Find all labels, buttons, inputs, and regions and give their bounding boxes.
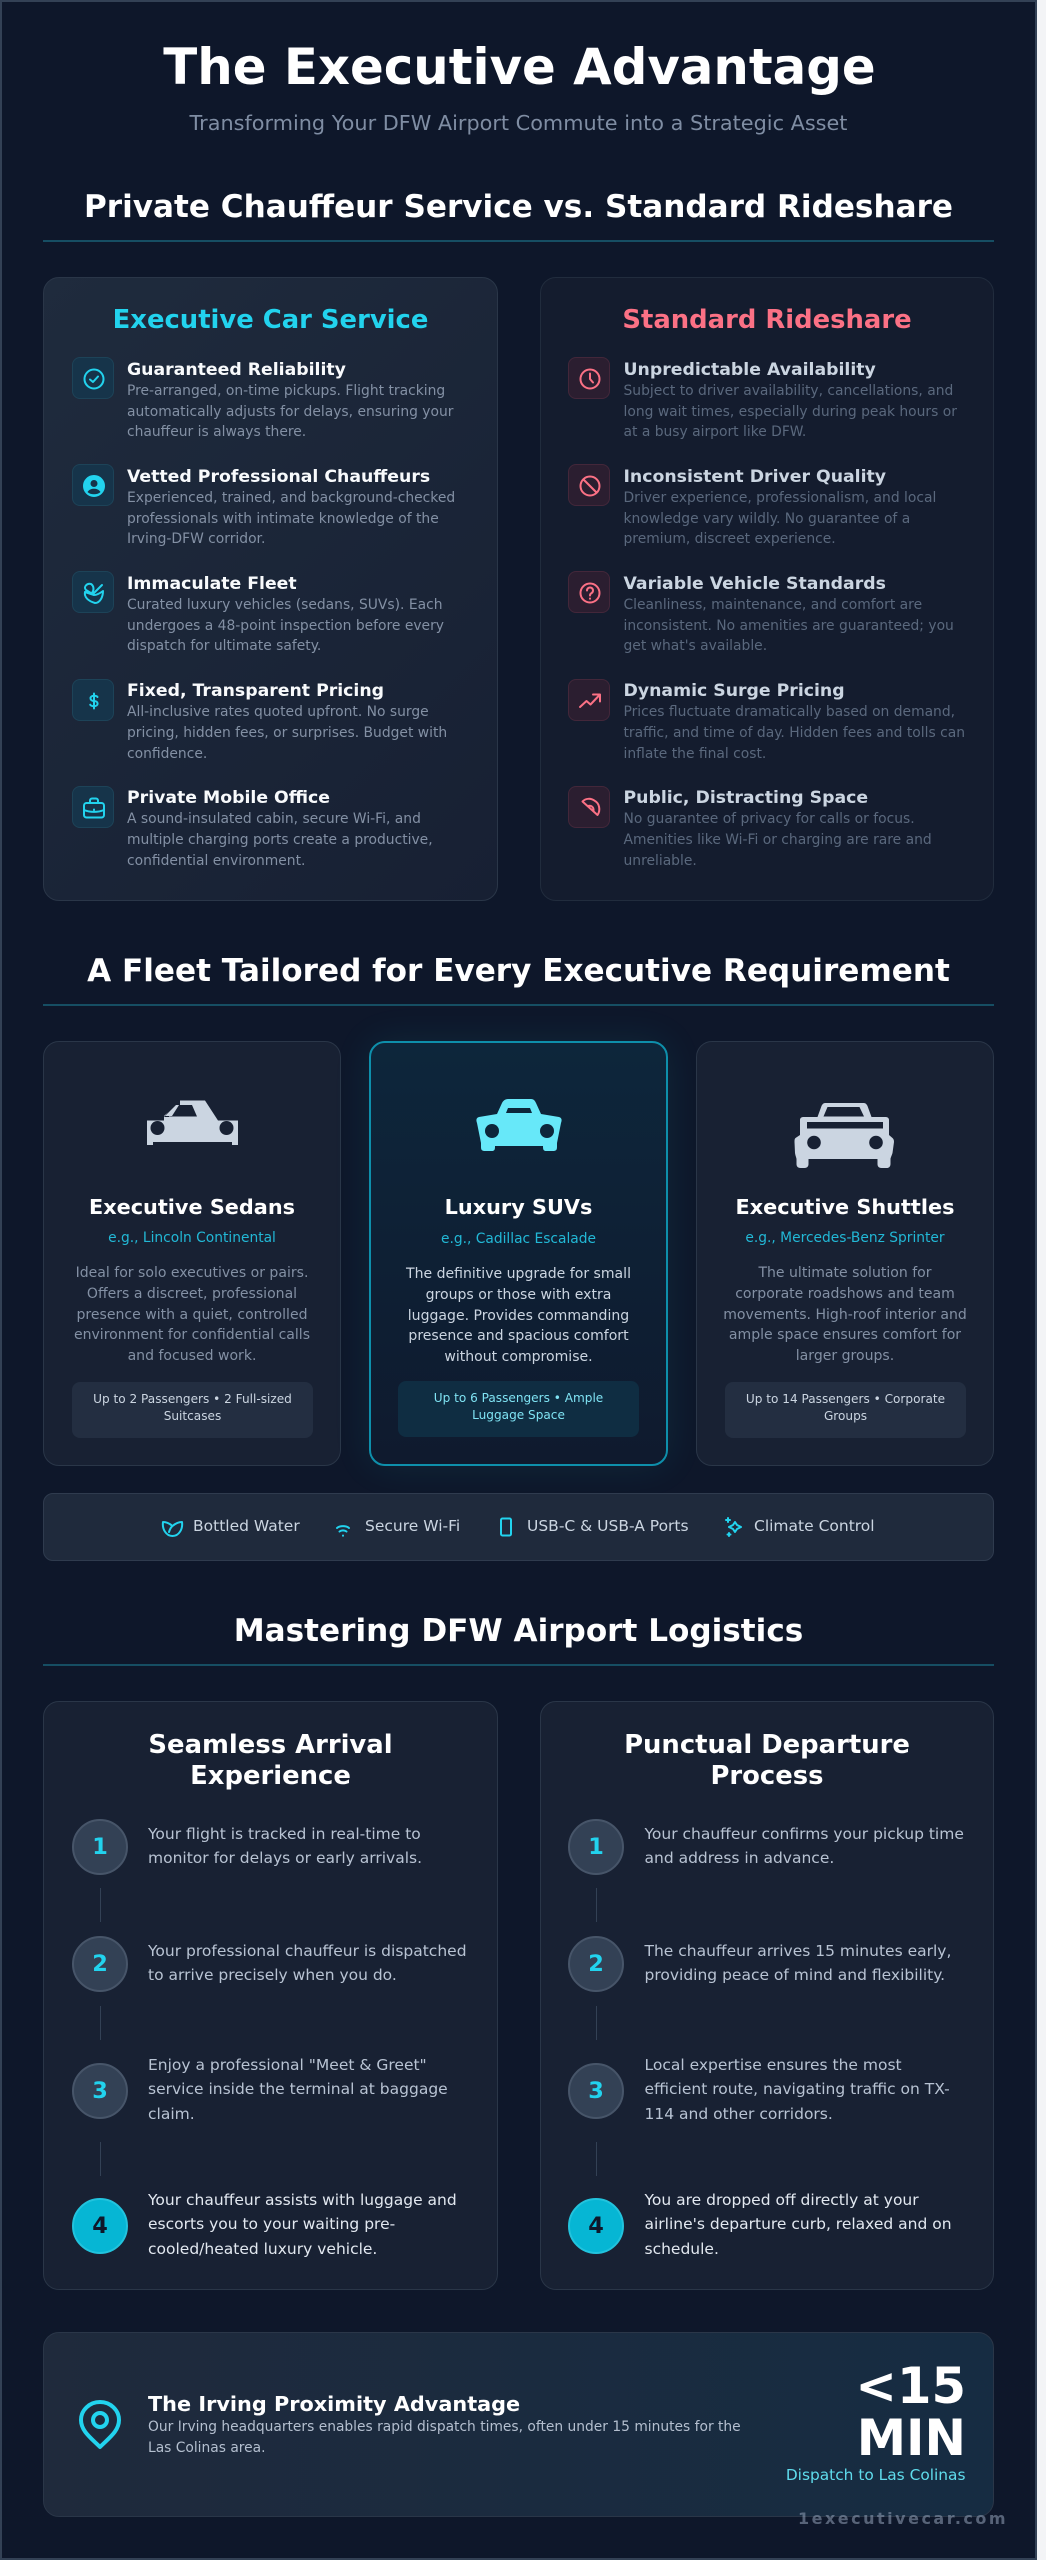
icon: map pin <box>79 2400 121 2450</box>
icon: clock <box>568 357 610 399</box>
item: variable vehicle standards: inconsistent. No amenities are guaranteed; you <box>624 618 954 634</box>
icon: sparkle <box>725 1517 742 1537</box>
panel: executive shuttles: e.g., Mercedes-Benz Sprinter <box>745 1230 945 1246</box>
item: variable vehicle standards: get what's available. <box>624 638 767 654</box>
callout text: Las Colinas area. <box>148 2440 266 2456</box>
step 3 text: service inside the terminal at baggage <box>148 2080 448 2098</box>
item: surge pricing: traffic, and time of day. Hidden fees and tolls can <box>624 725 965 741</box>
panel: executive sedans: Ideal for solo executives or pairs. <box>76 1265 308 1281</box>
item: immaculate fleet: Immaculate Fleet <box>127 574 297 594</box>
step 2 text <box>644 1942 951 1984</box>
panel: executive shuttles: The ultimate solution for <box>758 1265 932 1281</box>
heading: arrival: Experience <box>190 1760 351 1790</box>
icon: question <box>568 571 610 613</box>
item: immaculate fleet: undergoes a 48-point inspection before every <box>127 618 444 634</box>
step 1: 1 <box>588 1834 604 1860</box>
item: guaranteed reliability: automatically adjusts for delays, ensuring your <box>127 404 453 420</box>
spec: sedans <box>72 1382 313 1438</box>
icon: half disc <box>568 786 610 828</box>
item: immaculate fleet: Curated luxury vehicles (sedans, SUVs). Each <box>127 597 443 613</box>
subtitle: Transforming Your DFW Airport Commute into a Strategic Asset <box>190 111 847 135</box>
item: inconsistent quality <box>568 464 936 547</box>
watermark: 1executivecar.com <box>798 2509 1008 2528</box>
stat: under 15 min: <15 <box>855 2357 966 2415</box>
icon: check circle <box>72 357 114 399</box>
spec: sedans: Suitcases <box>164 1409 221 1423</box>
item: inconsistent quality: Driver experience, professionalism, and local <box>624 490 936 506</box>
step 2: 2 <box>92 1951 108 1977</box>
heading: departure <box>624 1730 910 1790</box>
step 4 text: airline's departure curb, relaxed and on <box>644 2215 952 2233</box>
item: public space: Public, Distracting Space <box>624 788 868 808</box>
item: unpredictable availability: Subject to driver availability, cancellations, and <box>624 383 953 399</box>
item: mobile office: confidential environment. <box>127 853 305 869</box>
panel: departure <box>540 1701 994 2290</box>
item: vetted chauffeurs: Irving-DFW corridor. <box>127 531 265 547</box>
item: vetted chauffeurs: professionals with intimate knowledge of the <box>127 511 439 527</box>
step 3: 3 <box>92 2078 108 2104</box>
step 1 text <box>148 1825 422 1867</box>
panel: executive shuttles <box>696 1041 994 1466</box>
item: guaranteed reliability <box>72 357 454 440</box>
icon: phone <box>500 1518 512 1536</box>
item: mobile office: A sound-insulated cabin, secure Wi-Fi, and <box>127 811 421 827</box>
item: unpredictable availability: Unpredictable Availability <box>624 360 876 380</box>
step 1: 1 <box>92 1834 108 1860</box>
amenity: bottled water: Bottled Water <box>193 1517 300 1535</box>
heading: logistics section: Mastering DFW Airport Logistics <box>234 1613 803 1649</box>
item: surge pricing: Dynamic Surge Pricing <box>624 681 845 701</box>
item: mobile office: Private Mobile Office <box>127 788 330 808</box>
spec: SUVs: Up to 6 Passengers • Ample <box>434 1391 603 1405</box>
step 4 text: schedule. <box>644 2240 719 2258</box>
icon: prohibited <box>568 464 610 506</box>
item: transparent pricing: pricing, hidden fees, or surprises. Budget with <box>127 725 447 741</box>
item: inconsistent quality: Inconsistent Driver Quality <box>624 466 886 486</box>
step 1 text: Your flight is tracked in real-time to <box>148 1825 421 1843</box>
item: surge pricing: Prices fluctuate dramatically based on demand, <box>624 704 955 720</box>
panel: executive shuttles: ample space ensures comfort for <box>729 1327 961 1343</box>
step 4 text: escorts you to your waiting pre- <box>148 2215 395 2233</box>
item: transparent pricing <box>72 679 447 762</box>
item: public space: Amenities like Wi-Fi or charging are rare and <box>624 832 932 848</box>
spec: shuttles: Groups <box>824 1409 867 1423</box>
item: immaculate fleet <box>72 571 444 654</box>
step 4: 4 <box>588 2213 604 2239</box>
step 3 text <box>148 2056 448 2123</box>
panel: standard rideshare <box>540 277 994 901</box>
step 1 <box>72 1819 128 1875</box>
callout text <box>148 2419 741 2456</box>
spec: shuttles: Up to 14 Passengers • Corporate <box>746 1392 945 1406</box>
item: guaranteed reliability: Guaranteed Reliability <box>127 360 346 380</box>
panel: executive sedans: environment for confidential calls <box>74 1327 310 1343</box>
panel: executive car service <box>43 277 498 901</box>
step 4 text: Your chauffeur assists with luggage and <box>148 2191 457 2209</box>
step 3 text: Enjoy a professional "Meet & Greet" <box>148 2056 427 2074</box>
callout text: Our Irving headquarters enables rapid dispatch times, often under 15 minutes for the <box>148 2419 741 2435</box>
step 1 <box>568 1819 624 1875</box>
step 3 <box>72 2063 128 2119</box>
amenity: wifi: Secure Wi-Fi <box>365 1517 460 1535</box>
item: transparent pricing: confidence. <box>127 746 207 762</box>
step 3 text: 114 and other corridors. <box>644 2105 833 2123</box>
item: inconsistent quality: knowledge vary wildly. No guarantee of a <box>624 511 910 527</box>
panel: executive sedans: and focused work. <box>128 1348 256 1364</box>
item: public space: No guarantee of privacy for calls or focus. <box>624 811 915 827</box>
step 3 text: efficient route, navigating traffic on TX- <box>644 2080 950 2098</box>
icon: trending up <box>568 678 610 720</box>
panel: executive sedans: presence with a quiet, controlled <box>76 1307 308 1323</box>
item: mobile office: multiple charging ports create a productive, <box>127 832 433 848</box>
stat label: Dispatch to Las Colinas <box>786 2466 966 2484</box>
panel: luxury SUVs: presence and spacious comfort <box>408 1328 629 1344</box>
panel: luxury SUVs: Luxury SUVs <box>445 1195 592 1219</box>
amenity: climate: Climate Control <box>754 1517 875 1535</box>
spec: SUVs <box>398 1381 639 1437</box>
item: unpredictable availability: long wait times, especially during peak hours or <box>624 404 957 420</box>
icon: fleet shape <box>72 571 114 613</box>
amenity: ports: USB-C & USB-A Ports <box>527 1517 689 1535</box>
step 3: 3 <box>588 2078 604 2104</box>
step 4: 4 <box>92 2213 108 2239</box>
title: The Executive Advantage <box>163 38 876 96</box>
item: transparent pricing: Fixed, Transparent Pricing <box>127 681 384 701</box>
step 3 text: Local expertise ensures the most <box>644 2056 902 2074</box>
step 2 text <box>148 1942 467 1984</box>
icon: briefcase <box>72 786 114 828</box>
step 2 <box>568 1936 624 1992</box>
panel: executive sedans: Offers a discreet, professional <box>87 1286 297 1302</box>
step 3 text: claim. <box>148 2105 195 2123</box>
item: guaranteed reliability: chauffeur is always there. <box>127 424 306 440</box>
item: guaranteed reliability: Pre-arranged, on-time pickups. Flight tracking <box>127 383 445 399</box>
item: vetted chauffeurs <box>72 464 455 547</box>
spec: shuttles <box>725 1382 966 1438</box>
step 3 text <box>644 2056 950 2123</box>
spec: sedans: Up to 2 Passengers • 2 Full-sized <box>93 1392 292 1406</box>
step 4 text: You are dropped off directly at your <box>644 2191 919 2209</box>
icon: sedan <box>147 1100 238 1145</box>
item: surge pricing: inflate the final cost. <box>624 746 766 762</box>
heading: comparison section: Private Chauffeur Service vs. Standard Rideshare <box>84 189 953 225</box>
step 2 text: to arrive precisely when you do. <box>148 1966 397 1984</box>
step 2 text: The chauffeur arrives 15 minutes early, <box>644 1942 951 1960</box>
step 2 text: Your professional chauffeur is dispatched <box>148 1942 467 1960</box>
item: public space: unreliable. <box>624 853 697 869</box>
item: mobile office <box>72 786 433 869</box>
icon: SUV <box>476 1099 562 1151</box>
step 3 <box>568 2063 624 2119</box>
panel: luxury SUVs: without compromise. <box>444 1349 593 1365</box>
panel: luxury SUVs: The definitive upgrade for small <box>406 1266 631 1282</box>
icon: wifi <box>336 1525 350 1537</box>
item: vetted chauffeurs: Vetted Professional Chauffeurs <box>127 466 430 486</box>
icon: water <box>162 1521 184 1537</box>
step 1 text: and address in advance. <box>644 1849 834 1867</box>
step 1 text: monitor for delays or early arrivals. <box>148 1849 422 1867</box>
step 1 text: Your chauffeur confirms your pickup time <box>644 1825 964 1843</box>
heading: arrival <box>148 1730 393 1790</box>
item: transparent pricing: All-inclusive rates quoted upfront. No surge <box>127 704 429 720</box>
panel: luxury SUVs: luggage. Provides commanding <box>408 1308 629 1324</box>
item: variable vehicle standards: Cleanliness, maintenance, and comfort are <box>624 597 922 613</box>
step 2: 2 <box>588 1951 604 1977</box>
item: inconsistent quality: premium, discreet experience. <box>624 531 836 547</box>
stat: under 15 min: MIN <box>857 2409 966 2467</box>
step 4 text: cooled/heated luxury vehicle. <box>148 2240 377 2258</box>
panel: executive shuttles: movements. High-roof interior and <box>723 1307 967 1323</box>
heading: departure: Process <box>710 1760 824 1790</box>
panel: luxury SUVs <box>369 1041 668 1466</box>
item: immaculate fleet: dispatch for ultimate safety. <box>127 638 321 654</box>
panel: amenities bar <box>43 1493 994 1561</box>
item: vetted chauffeurs: Experienced, trained, and background-checked <box>127 490 455 506</box>
panel: executive shuttles: larger groups. <box>796 1348 894 1364</box>
heading: executive car service: Executive Car Service <box>113 304 428 334</box>
icon: user circle <box>72 464 114 506</box>
panel: irving proximity callout <box>43 2332 994 2517</box>
item: surge pricing <box>568 679 965 762</box>
heading: standard rideshare: Standard Rideshare <box>622 304 912 334</box>
item: variable vehicle standards <box>568 571 954 654</box>
panel: executive sedans: e.g., Lincoln Continental <box>108 1230 276 1246</box>
panel: executive sedans <box>43 1041 341 1466</box>
item: unpredictable availability <box>568 357 957 440</box>
panel: luxury SUVs: e.g., Cadillac Escalade <box>441 1231 596 1247</box>
panel: executive sedans: Executive Sedans <box>89 1195 295 1219</box>
heading: arrival: Seamless Arrival <box>148 1730 393 1760</box>
icon: shuttle <box>794 1103 894 1168</box>
step 4 <box>568 2198 624 2254</box>
icon: dollar <box>72 678 114 720</box>
panel: executive shuttles: Executive Shuttles <box>736 1195 954 1219</box>
item: variable vehicle standards: Variable Vehicle Standards <box>624 574 886 594</box>
step 4 <box>72 2198 128 2254</box>
heading: departure: Punctual Departure <box>624 1730 910 1760</box>
step 1 text <box>644 1825 964 1867</box>
heading: fleet section: A Fleet Tailored for Every Executive Requirement <box>87 953 950 989</box>
panel: arrival <box>43 1701 498 2290</box>
step 2 text: providing peace of mind and flexibility. <box>644 1966 945 1984</box>
spec: SUVs: Luggage Space <box>472 1408 565 1422</box>
stat: under 15 min <box>855 2357 966 2467</box>
callout title: The Irving Proximity Advantage <box>148 2392 520 2416</box>
panel: executive shuttles: corporate roadshows and team <box>735 1286 955 1302</box>
step 4 text <box>644 2191 952 2258</box>
item: public space <box>568 786 932 869</box>
item: unpredictable availability: at a busy airport like DFW. <box>624 424 806 440</box>
step 2 <box>72 1936 128 1992</box>
panel: luxury SUVs: groups or those with extra <box>426 1287 611 1303</box>
step 4 text <box>148 2191 457 2258</box>
